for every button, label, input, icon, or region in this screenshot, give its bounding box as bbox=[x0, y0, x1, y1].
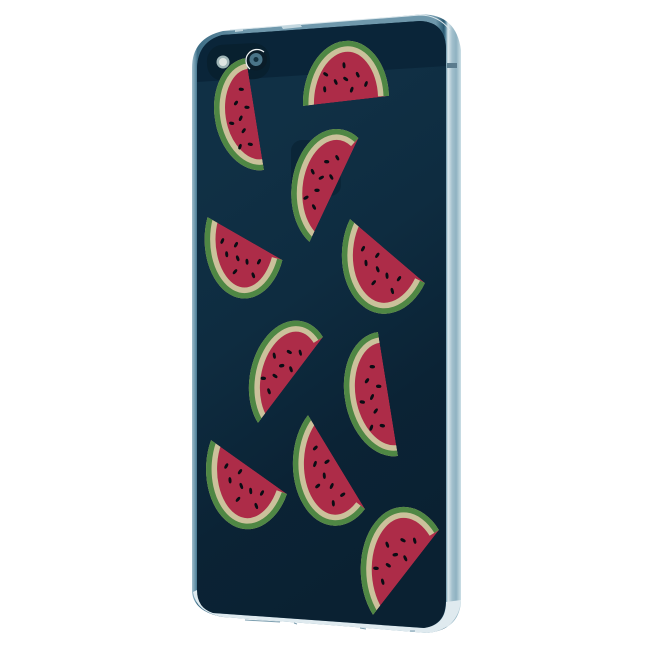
top highlight bbox=[230, 15, 450, 30]
camera and flash bbox=[216, 48, 267, 70]
watermelon 8 bbox=[206, 440, 287, 530]
fingerprint recess bbox=[291, 140, 341, 196]
lens ring highlight bbox=[246, 49, 264, 69]
watermelon 7 bbox=[344, 332, 398, 456]
watermelon 10 bbox=[360, 506, 439, 615]
camera housing bbox=[206, 42, 271, 82]
watermelon 6 bbox=[248, 320, 323, 423]
watermelon 2 bbox=[301, 36, 389, 106]
lens bbox=[245, 48, 267, 70]
watermelon 3 bbox=[291, 129, 358, 242]
watermelon 5 bbox=[342, 219, 425, 314]
back panel bbox=[197, 21, 446, 628]
bottom clear edge bbox=[193, 590, 461, 633]
watermelon 1 bbox=[214, 58, 264, 170]
watermelon 9 bbox=[292, 415, 365, 526]
watermelon 4 bbox=[204, 217, 282, 298]
case frame bbox=[192, 14, 461, 633]
dark top band bbox=[197, 21, 446, 82]
lens glass bbox=[250, 53, 262, 66]
bottom port marks bbox=[245, 620, 415, 631]
top buttons bbox=[235, 24, 302, 32]
flash bbox=[216, 56, 230, 68]
side button bbox=[447, 63, 457, 68]
phone case bbox=[192, 14, 461, 633]
